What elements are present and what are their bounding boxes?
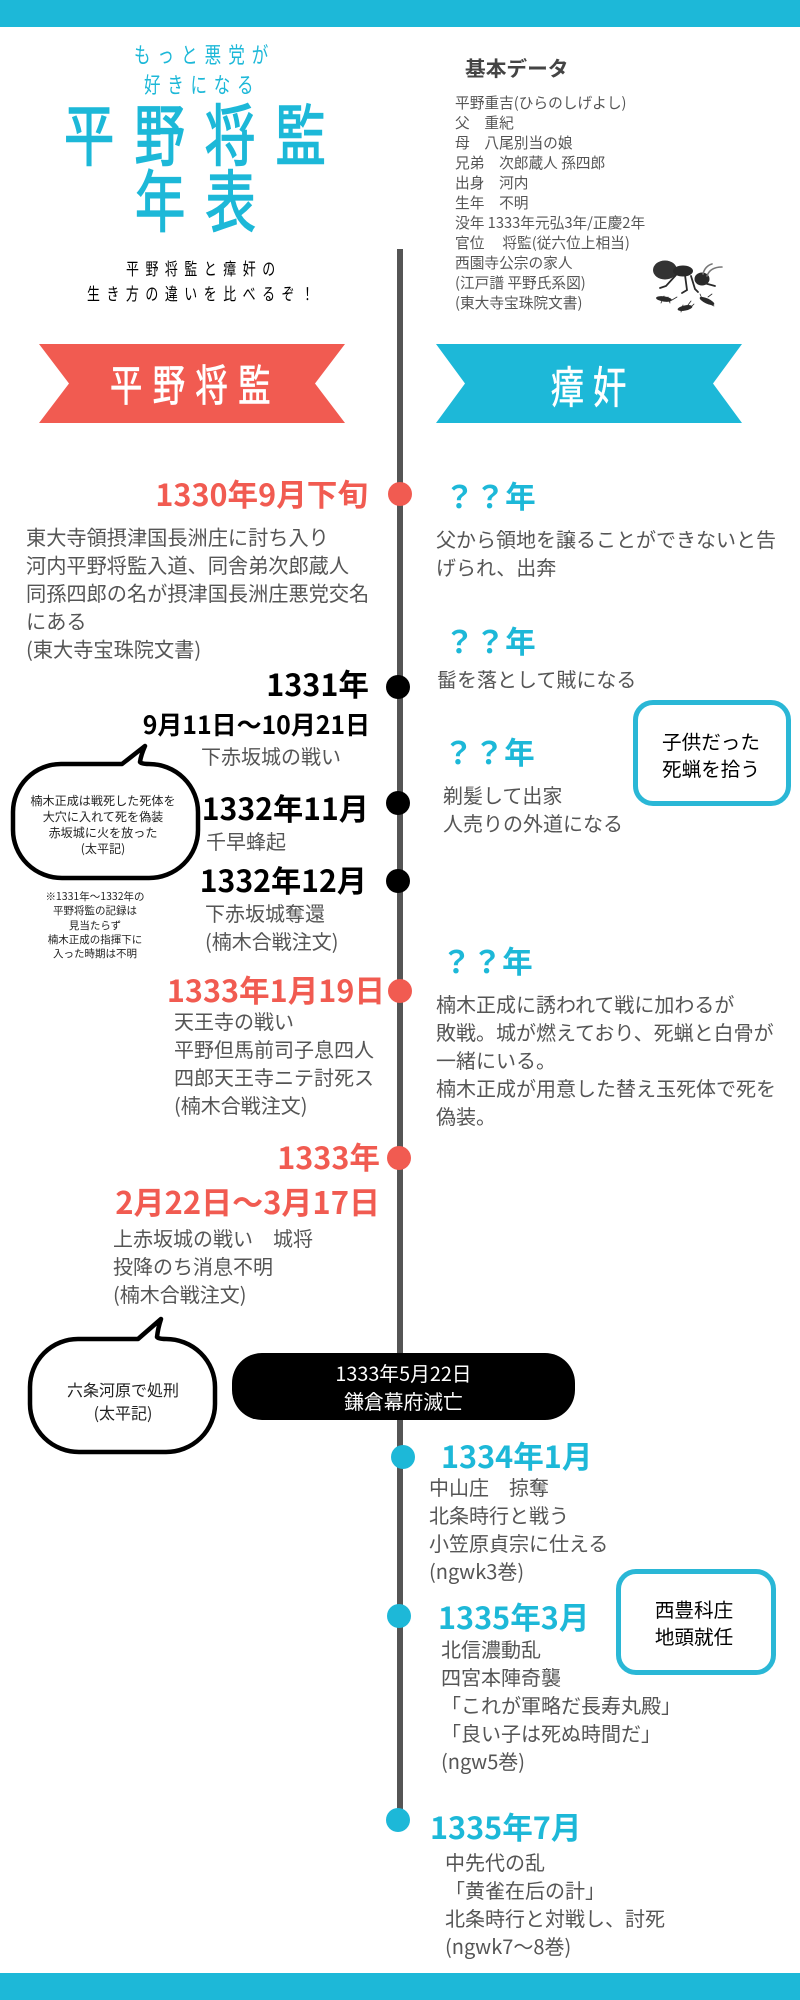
subtitle line 1: もっと悪党が xyxy=(134,38,275,70)
pill text xyxy=(335,1358,472,1415)
box text: 地頭就任 xyxy=(655,1621,733,1650)
tagline xyxy=(87,255,320,305)
date heading: 1334年1月 xyxy=(441,1433,592,1477)
basic data list: 西園寺公宗の家人 xyxy=(455,252,573,273)
description: 同孫四郎の名が摂津国長洲庄悪党交名 xyxy=(26,578,369,607)
left event: 1333年 xyxy=(113,1134,380,1308)
timeline dot xyxy=(388,482,412,506)
callout box: jito appointment xyxy=(616,1569,776,1675)
description: 剃髪して出家 xyxy=(443,780,562,809)
right event: ??年 1 xyxy=(436,473,776,581)
description: 河内平野将監入道、同舎弟次郎蔵人 xyxy=(26,550,349,579)
date heading: 1335年7月 xyxy=(430,1804,581,1848)
timeline dot xyxy=(386,675,410,699)
description: (楠木合戦注文) xyxy=(113,1279,247,1308)
right event: 1334年1月 xyxy=(429,1433,608,1585)
description: 北信濃動乱 xyxy=(441,1634,541,1663)
callout text: (太平記) xyxy=(94,1400,152,1424)
top bar xyxy=(0,0,800,27)
banner: 瘴奸 xyxy=(436,344,742,423)
callout text xyxy=(30,792,176,857)
description xyxy=(113,1223,313,1308)
banner: 平野将監: 平野将監 xyxy=(110,352,281,414)
description xyxy=(436,989,776,1130)
description: 小笠原貞宗に仕える xyxy=(429,1528,608,1557)
description: 人売りの外道になる xyxy=(443,808,623,837)
description: (ngw5巻) xyxy=(441,1746,525,1775)
basic data list: 兄弟 次郎蔵人 孫四郎 xyxy=(455,152,605,173)
callout text: 楠木正成は戦死した死体を xyxy=(30,792,176,809)
left event: 1332年11月 xyxy=(202,785,369,855)
date heading: 1330年9月下旬 xyxy=(155,471,368,515)
description xyxy=(429,1472,608,1585)
callout: Kusunoki note xyxy=(10,744,200,880)
basic data list: 母 八尾別当の娘 xyxy=(455,132,573,153)
description: 偽装。 xyxy=(436,1101,496,1130)
description: 天王寺の戦い xyxy=(174,1006,294,1035)
right event: ??年 2 xyxy=(437,618,636,693)
date heading: ？？年 xyxy=(444,618,536,662)
tagline: 平野将監と瘴奸の xyxy=(126,255,282,280)
date heading: ？？年 xyxy=(444,473,536,517)
box text: 死蝋を拾う xyxy=(662,753,760,782)
description xyxy=(441,1634,681,1775)
date range: 9月11日～10月21日 xyxy=(143,706,370,742)
pill text: 鎌倉幕府滅亡 xyxy=(344,1386,463,1415)
timeline spine xyxy=(397,249,403,1820)
main title line 2: 年表 xyxy=(135,149,276,246)
description: (東大寺宝珠院文書) xyxy=(26,634,201,663)
description: 北条時行と戦う xyxy=(429,1500,569,1529)
footnote: 平野将監の記録は xyxy=(53,903,137,918)
basic data list: (江戸譜 平野氏系図) xyxy=(455,272,586,293)
timeline dot xyxy=(386,791,410,815)
basic data panel xyxy=(455,52,645,313)
description: げられ、出奔 xyxy=(436,552,556,581)
description: 一緒にいる。 xyxy=(436,1045,556,1074)
left event: 1332年12月 xyxy=(200,857,367,955)
description: 「これが軍略だ長寿丸殿」 xyxy=(441,1690,681,1719)
description: 髷を落として賊になる xyxy=(437,664,636,693)
description xyxy=(26,522,369,663)
description: 平野但馬前司子息四人 xyxy=(174,1034,374,1063)
bottom bar xyxy=(0,1973,800,2000)
basic data list: 父 重紀 xyxy=(455,112,514,133)
tagline: 生き方の違いを比べるぞ！ xyxy=(87,280,320,305)
footnote: 見当たらず xyxy=(69,918,121,933)
basic data heading: 基本データ xyxy=(465,52,568,82)
description: 四郎天王寺ニテ討死ス xyxy=(174,1062,374,1091)
callout box: child shiro xyxy=(633,700,791,806)
icon: termites xyxy=(653,260,723,312)
description: (楠木合戦注文) xyxy=(174,1090,308,1119)
footnote xyxy=(45,889,145,961)
description: 「黄雀在后の計」 xyxy=(445,1875,605,1904)
right event: ??年 4 xyxy=(436,938,776,1130)
description: 千早蜂起 xyxy=(206,826,286,855)
left event: 1333年1月19日 xyxy=(167,967,385,1119)
date range: 2月22日～3月17日 xyxy=(115,1178,380,1223)
timeline dot xyxy=(391,1445,415,1469)
callout: execution xyxy=(28,1316,218,1454)
basic data list: (東大寺宝珠院文書) xyxy=(455,292,582,313)
description xyxy=(205,898,339,955)
box text xyxy=(655,1594,733,1650)
callout text: 赤坂城に火を放った xyxy=(49,824,157,841)
timeline dot xyxy=(387,1146,411,1170)
description xyxy=(436,524,776,581)
callout text: 六条河原で処刑 xyxy=(67,1377,179,1401)
timeline dot xyxy=(386,1808,410,1832)
description: 楠木正成に誘われて戦に加わるが xyxy=(436,989,734,1018)
date heading: ？？年 xyxy=(443,729,535,773)
footnote: ※1331年～1332年の xyxy=(45,889,145,904)
description xyxy=(443,780,623,837)
description: 中先代の乱 xyxy=(445,1847,545,1876)
description: 下赤坂城奪還 xyxy=(205,898,325,927)
timeline dot xyxy=(386,869,410,893)
description: にある xyxy=(26,606,87,635)
description: 敗戦。城が燃えており、死蝋と白骨が xyxy=(436,1017,774,1046)
description: 四宮本陣奇襲 xyxy=(441,1662,561,1691)
description: 「良い子は死ぬ時間だ」 xyxy=(441,1718,661,1747)
date heading: ？？年 xyxy=(441,938,533,982)
banner: 瘴奸: 瘴奸 xyxy=(551,352,635,416)
date heading: 1335年3月 xyxy=(438,1594,589,1638)
description: (楠木合戦注文) xyxy=(205,926,339,955)
description xyxy=(445,1847,665,1960)
description: 東大寺領摂津国長洲庄に討ち入り xyxy=(26,522,329,551)
subtitle line 2: 好きになる xyxy=(144,68,260,100)
right event: ??年 3 xyxy=(443,729,623,837)
right event: 1335年7月 xyxy=(430,1804,665,1960)
pill text: 1333年5月22日 xyxy=(335,1358,472,1387)
box text: 西豊科庄 xyxy=(655,1594,733,1623)
description: 北条時行と対戦し、討死 xyxy=(445,1903,665,1932)
description: 下赤坂城の戦い xyxy=(201,741,341,770)
description: 投降のち消息不明 xyxy=(113,1251,273,1280)
callout text xyxy=(67,1377,179,1424)
right event: 1335年3月 xyxy=(438,1594,681,1775)
basic data list: 没年 1333年元弘3年/正慶2年 xyxy=(455,212,645,233)
footnote: 入った時期は不明 xyxy=(53,946,137,961)
date heading: 1332年11月 xyxy=(202,785,369,829)
left event: 1331年 xyxy=(143,661,370,770)
banner: 平野将監 xyxy=(39,344,345,423)
title block xyxy=(64,38,346,246)
timeline dot xyxy=(387,1604,411,1628)
box text: 子供だった xyxy=(662,726,760,755)
description: 上赤坂城の戦い 城将 xyxy=(113,1223,313,1252)
basic data list: 出身 河内 xyxy=(455,172,528,193)
description xyxy=(174,1006,374,1119)
date heading: 1333年 xyxy=(277,1134,380,1178)
description: (ngwk3巻) xyxy=(429,1556,524,1585)
date heading: 1332年12月 xyxy=(200,857,367,901)
timeline dot xyxy=(388,979,412,1003)
description: 父から領地を譲ることができないと告 xyxy=(436,524,776,553)
box text xyxy=(662,726,760,782)
description: 中山庄 掠奪 xyxy=(429,1472,549,1501)
basic data list: 生年 不明 xyxy=(455,192,528,213)
basic data list: 平野重吉(ひらのしげよし) xyxy=(455,92,626,113)
black pill: fall of Kamakura xyxy=(232,1353,575,1420)
description: 楠木正成が用意した替え玉死体で死を xyxy=(436,1073,776,1102)
callout text: 大穴に入れて死を偽装 xyxy=(43,808,163,825)
date heading: 1333年1月19日 xyxy=(167,967,385,1011)
left event: 1330年9月下旬 xyxy=(26,471,369,663)
description: (ngwk7～8巻) xyxy=(445,1931,571,1960)
basic data list: 官位 将監(従六位上相当) xyxy=(455,232,630,253)
basic data list xyxy=(455,92,645,313)
footnote: 楠木正成の指揮下に xyxy=(48,932,142,947)
main title line 1: 平野将監 xyxy=(64,83,346,180)
date heading: 1331年 xyxy=(266,661,369,705)
callout text: (太平記) xyxy=(81,840,125,857)
